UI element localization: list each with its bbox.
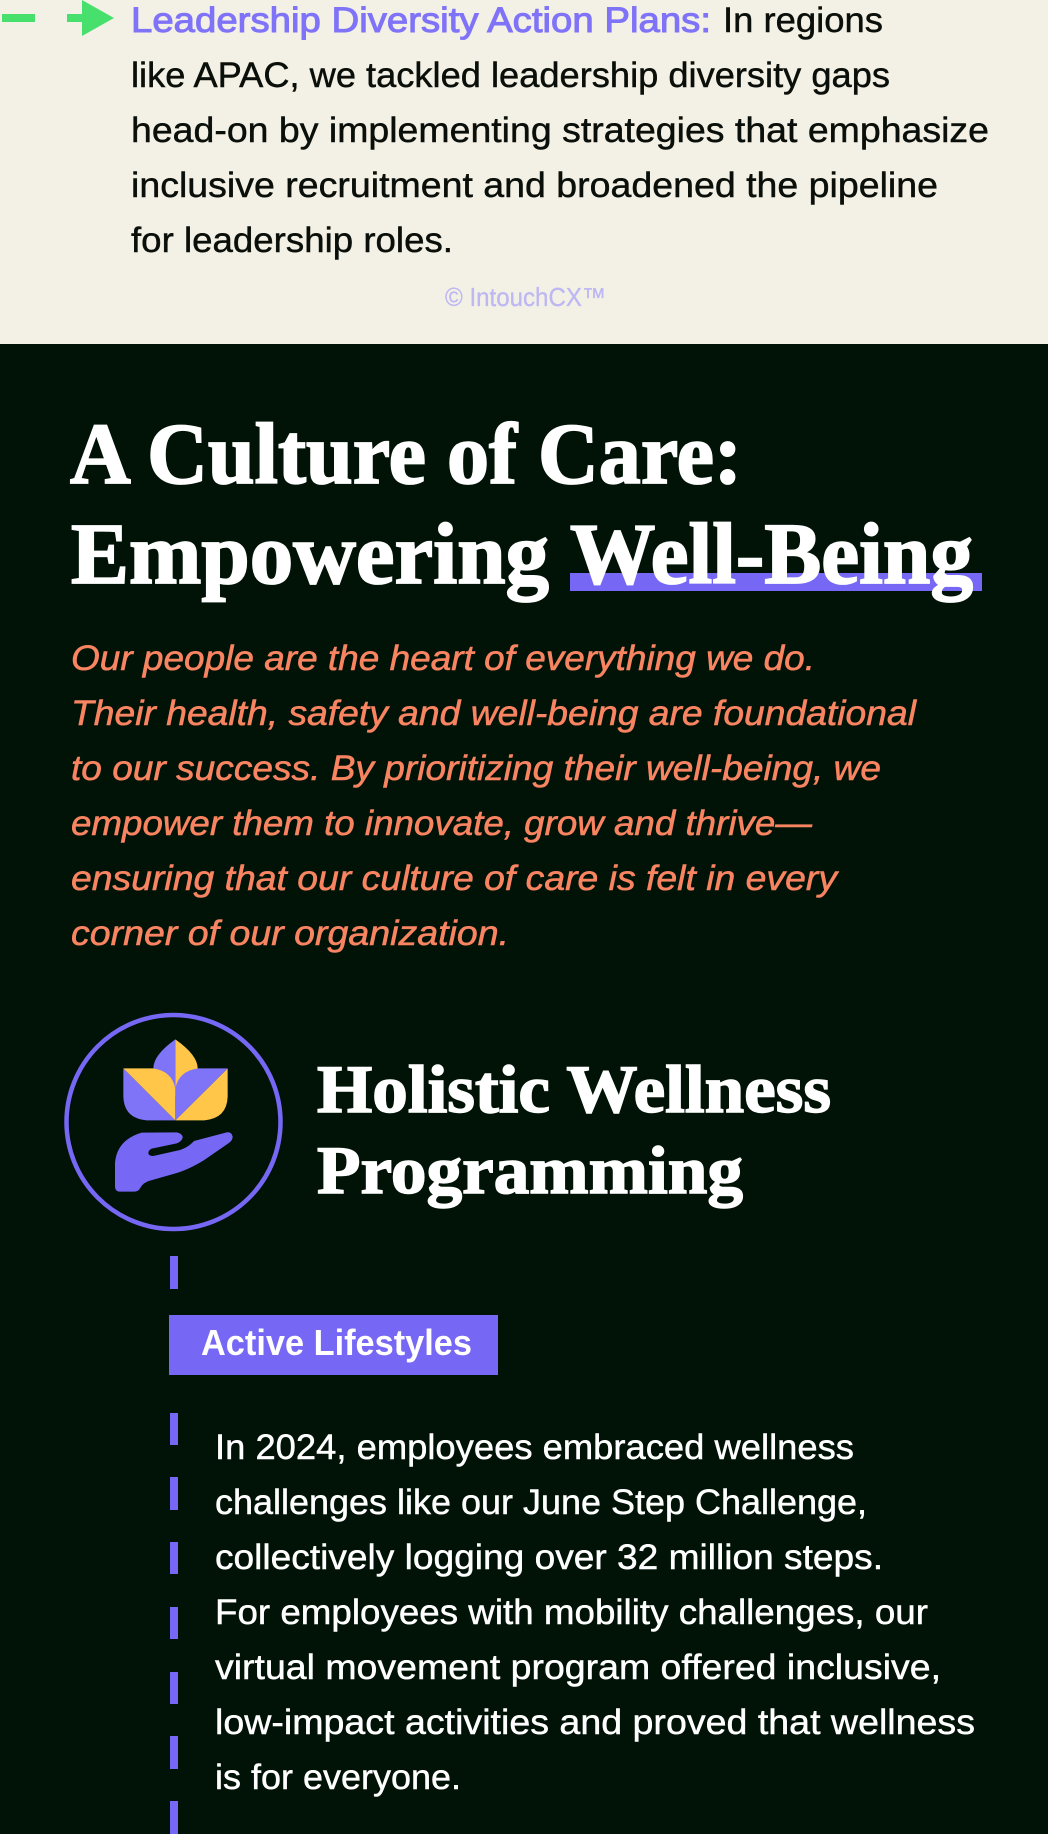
text block: leadership diversity action plans: for leadership roles. (131, 220, 453, 260)
text block: leadership diversity action plans: In regions (723, 0, 883, 40)
text block: active lifestyles description: is for everyone. (215, 1757, 461, 1797)
text block: leadership diversity action plans: head-on by implementing strategies that emphasize (131, 110, 989, 150)
text block: leadership diversity action plans: inclusive recruitment and broadened the pipeline (131, 165, 938, 205)
text block: leadership diversity action plans: like APAC, we tackled leadership diversity gaps (131, 55, 890, 95)
icon: lotus in open hand inside circle (66, 1015, 280, 1229)
text block: leadership diversity action plans: Leadership Diversity Action Plans: (131, 0, 711, 40)
badge: active lifestyles: Active Lifestyles (201, 1322, 472, 1363)
arrow: green dashed bullet arrow (2, 0, 114, 36)
title highlight bar under well-being (570, 573, 982, 591)
intro paragraph in coral italics: Our people are the heart of everything we do. (71, 638, 815, 678)
copyright notice: © IntouchCX™ (445, 282, 606, 312)
intro paragraph in coral italics (71, 638, 917, 953)
text block: active lifestyles description: For employees with mobility challenges, our (215, 1592, 928, 1632)
text block: active lifestyles description: virtual movement program offered inclusive, (215, 1647, 941, 1687)
heading: holistic wellness programming: Programming (317, 1132, 743, 1208)
intro paragraph in coral italics: ensuring that our culture of care is felt in every (71, 858, 839, 898)
text block: active lifestyles description: low-impact activities and proved that wellness (215, 1702, 975, 1742)
heading: holistic wellness programming: Holistic Wellness (317, 1051, 831, 1127)
intro paragraph in coral italics: corner of our organization. (71, 913, 509, 953)
text block: active lifestyles description: challenges like our June Step Challenge, (215, 1482, 867, 1522)
badge: active lifestyles (169, 1315, 498, 1375)
text block: active lifestyles description: In 2024, employees embraced wellness (215, 1427, 854, 1467)
title: a culture of care: A Culture of Care: (70, 405, 742, 502)
title: a culture of care (70, 405, 982, 602)
panel: cream top section (0, 0, 1048, 344)
text block: leadership diversity action plans (131, 0, 989, 260)
heading: holistic wellness programming (317, 1051, 831, 1208)
text block: active lifestyles description (215, 1427, 975, 1797)
intro paragraph in coral italics: empower them to innovate, grow and thrive— (71, 803, 813, 843)
title: a culture of care: Well-Being (570, 505, 973, 602)
intro paragraph in coral italics: Their health, safety and well-being are foundational (71, 693, 917, 733)
text block: active lifestyles description: collectively logging over 32 million steps. (215, 1537, 883, 1577)
dashed vertical timeline connector (170, 1256, 178, 1834)
intro paragraph in coral italics: to our success. By prioritizing their well-being, we (71, 748, 881, 788)
title: a culture of care: Empowering (71, 505, 549, 602)
